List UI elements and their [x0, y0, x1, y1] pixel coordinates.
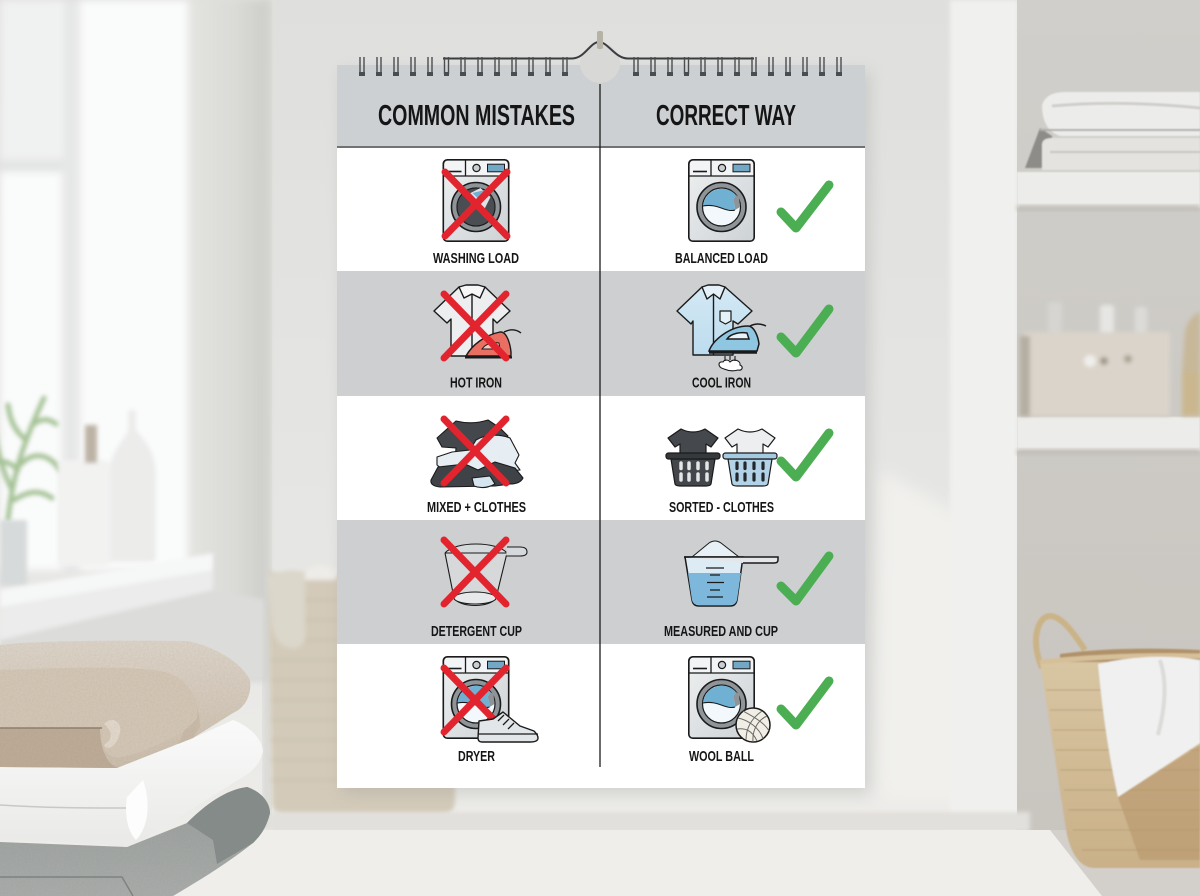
label: washing load: WASHING LOAD — [433, 250, 519, 267]
right wicker basket — [1036, 616, 1200, 868]
calendar poster — [337, 31, 870, 794]
basket holes light — [737, 463, 763, 480]
icon: steam — [719, 356, 742, 371]
row 5 mistake: dryer — [443, 657, 538, 765]
label: dryer: DRYER — [458, 748, 495, 765]
label: mixed clothes: MIXED + CLOTHES — [427, 499, 526, 516]
label: sorted clothes: SORTED - CLOTHES — [669, 499, 774, 516]
window sill — [0, 553, 268, 680]
label: detergent cup: DETERGENT CUP — [431, 623, 522, 640]
hanging hole — [580, 43, 620, 83]
icon: green check — [781, 681, 829, 725]
label: cool iron: COOL IRON — [692, 374, 751, 392]
label: wool ball: WOOL BALL — [689, 748, 754, 765]
bottles and pot — [0, 410, 156, 586]
floor band — [270, 812, 1030, 832]
icon: red cross — [444, 294, 506, 358]
row 5 correct: wool ball — [689, 657, 829, 765]
poster sheet — [337, 65, 865, 788]
heading: correct way: CORRECT WAY — [656, 100, 796, 132]
spiral binding — [359, 42, 842, 74]
column divider — [599, 84, 601, 767]
icon: dark shirt in basket — [666, 429, 720, 486]
icon: empty cup — [445, 544, 527, 606]
label: measured and cup: MEASURED AND CUP — [664, 623, 778, 640]
shelf box and bottles — [1020, 302, 1200, 416]
grey row: detergent — [337, 520, 865, 644]
icon: washer — [689, 657, 754, 738]
icon: overloaded washer — [443, 160, 509, 241]
row 4 mistake: detergent cup — [431, 540, 527, 640]
sunlight on wall — [880, 470, 970, 800]
icon: clothes pile — [431, 420, 523, 488]
wall shadow band — [264, 0, 270, 830]
icon: red cross — [444, 419, 506, 483]
icon: powder heap — [692, 541, 739, 557]
icon: balanced washer — [689, 160, 754, 241]
icon: washer — [443, 657, 509, 738]
icon: red cross — [444, 540, 506, 604]
icon: blue shirt — [677, 285, 752, 355]
hook — [597, 31, 603, 49]
white towel — [0, 720, 263, 847]
row 4 correct: measured cup — [664, 541, 829, 640]
icon: red cross — [445, 172, 507, 236]
cup ticks — [706, 568, 724, 597]
gray towel — [0, 787, 270, 896]
towel texture — [0, 641, 270, 896]
icon: cup handle — [684, 557, 778, 563]
label: hot iron: HOT IRON — [450, 374, 502, 392]
icon: green check — [781, 556, 829, 601]
heading: common mistakes: COMMON MISTAKES — [378, 100, 575, 132]
icon: cool iron — [709, 324, 766, 352]
floor — [1000, 828, 1200, 896]
icon: green check — [781, 309, 829, 353]
row 3 correct: sorted clothes — [666, 429, 829, 516]
plant — [0, 398, 60, 520]
row 2 correct: cool iron — [677, 285, 829, 392]
basket holes dark — [681, 463, 707, 480]
icon: wool ball — [736, 708, 770, 742]
label: balanced load: BALANCED LOAD — [675, 250, 768, 267]
row 3 mistake: mixed clothes — [427, 419, 526, 516]
icon: cup with liquid — [685, 557, 743, 606]
alcove and shelves — [950, 0, 1200, 832]
icon: sneaker — [478, 712, 538, 742]
icon: hot iron — [465, 330, 521, 358]
countertop — [170, 830, 1102, 896]
sneaker details — [478, 715, 538, 734]
shelf towels — [1025, 92, 1200, 170]
header band — [337, 65, 865, 146]
wire hanger — [443, 42, 754, 58]
window — [0, 0, 268, 680]
left basket — [268, 566, 455, 815]
poster shadow — [342, 72, 870, 794]
header rule — [337, 146, 865, 148]
row 1 mistake: washing load — [433, 160, 519, 267]
grey row: hot iron — [337, 271, 865, 396]
row 1 correct: balanced load — [675, 160, 829, 267]
row 2 mistake: hot iron — [434, 285, 521, 392]
icon: white shirt in basket — [723, 429, 777, 486]
towel stack — [0, 641, 270, 896]
icon: shirt — [434, 285, 510, 356]
icon: green check — [781, 185, 829, 228]
icon: green check — [781, 433, 829, 477]
coils — [359, 57, 842, 74]
icon: red cross — [444, 668, 506, 732]
beige towel — [0, 641, 250, 768]
